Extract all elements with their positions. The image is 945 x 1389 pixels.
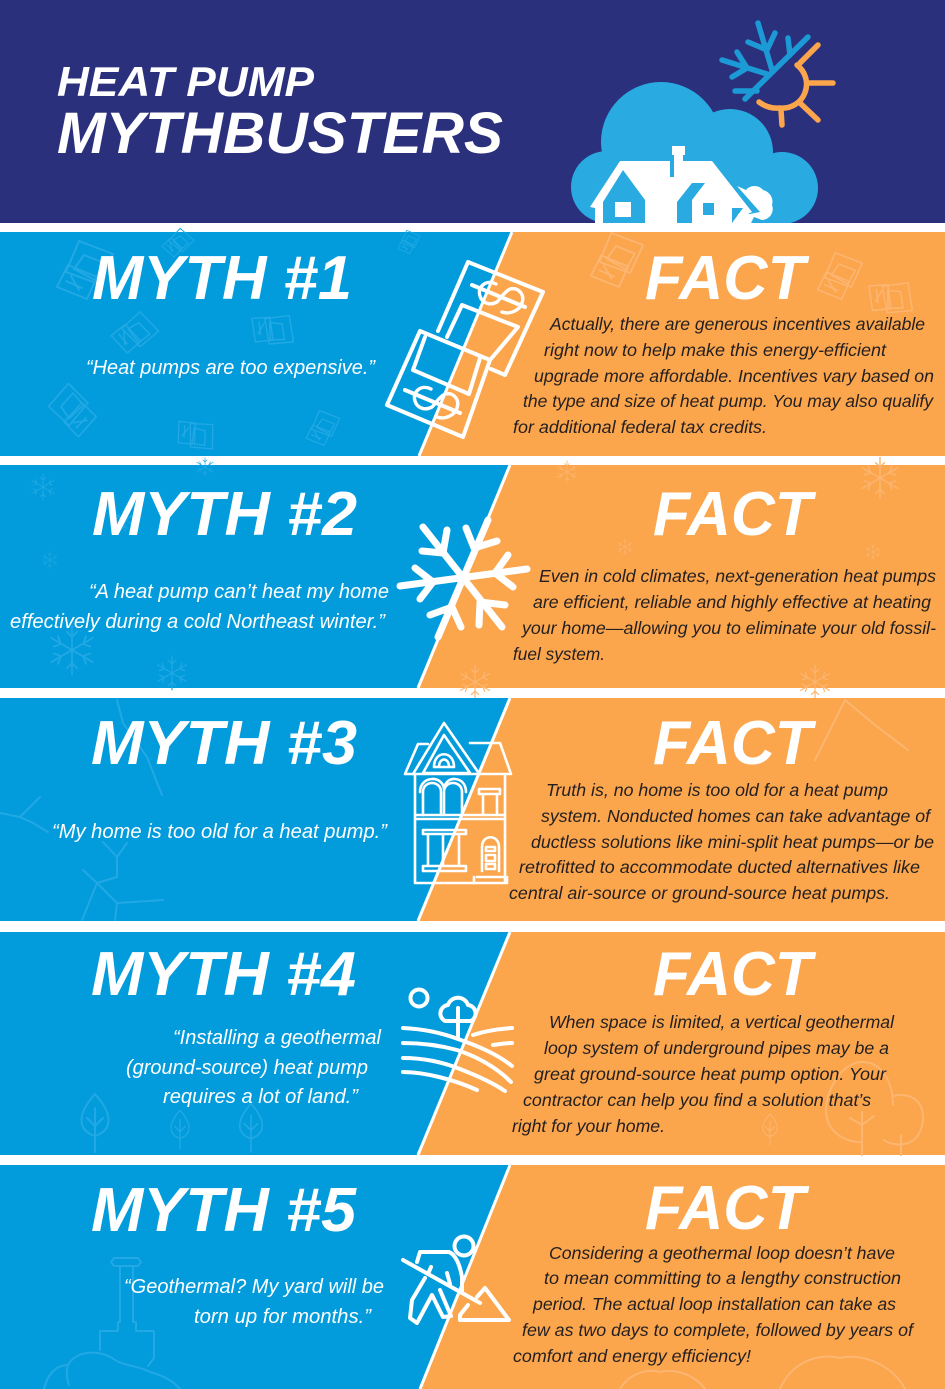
fact 1 text: right now to help make this energy-efficient [544, 340, 887, 360]
fact 3 text: ductless solutions like mini-split heat pumps—or be [531, 832, 934, 852]
fact 5 text [513, 1243, 915, 1366]
fact 5 text: to mean committing to a lengthy construction [544, 1268, 901, 1288]
title: HEAT PUMP [57, 58, 315, 105]
panel: myth 3 and fact [0, 698, 945, 921]
heading: myth 1: MYTH #1 [92, 244, 352, 313]
icon: snowflake [400, 520, 527, 637]
fact 4 text: right for your home. [512, 1116, 665, 1136]
title [57, 58, 503, 166]
fact 3 text: retrofitted to accommodate ducted alternatives like [519, 857, 920, 877]
heading: myth 5: MYTH #5 [91, 1176, 358, 1245]
icon: cloud and house [571, 82, 818, 224]
icon: worker with shovel [403, 1236, 509, 1323]
heading: fact 1: FACT [645, 244, 810, 313]
icon: land and tree [403, 990, 512, 1091]
icon: money bills [387, 262, 543, 437]
myth 2 quote: effectively during a cold Northeast winter.” [10, 611, 386, 633]
fact 5 text: Considering a geothermal loop doesn’t have [549, 1243, 895, 1263]
fact 2 text: fuel system. [513, 644, 605, 664]
fact 4 text: When space is limited, a vertical geothermal [549, 1012, 895, 1032]
myth 5 quote: “Geothermal? My yard will be [124, 1276, 384, 1298]
myth 1 quote: “Heat pumps are too expensive.” [86, 357, 376, 379]
title: MYTHBUSTERS [57, 101, 503, 166]
icon: old house [405, 723, 511, 883]
fact 1 text: Actually, there are generous incentives available [549, 314, 925, 334]
icon: snowflake and sun [722, 23, 833, 125]
fact 2 text [513, 566, 936, 664]
background pattern: snowflakes [32, 457, 898, 699]
myth 4 quote: (ground-source) heat pump [126, 1057, 368, 1079]
fact 1 text: for additional federal tax credits. [513, 417, 767, 437]
panel: myth 5 and fact [0, 1165, 945, 1389]
myth 3 quote: “My home is too old for a heat pump.” [52, 821, 388, 843]
myth 4 quote [126, 1027, 382, 1108]
fact 4 text [512, 1012, 895, 1136]
fact 3 text: central air-source or ground-source heat pumps. [509, 883, 890, 903]
heading: myth 2: MYTH #2 [92, 480, 357, 549]
fact 3 text: Truth is, no home is too old for a heat pump [546, 780, 888, 800]
fact 4 text: great ground-source heat pump option. Your [534, 1064, 887, 1084]
fact 5 text: period. The actual loop installation can take as [532, 1294, 896, 1314]
fact 1 text: the type and size of heat pump. You may also qualify [523, 391, 934, 411]
fact 1 text: upgrade more affordable. Incentives vary based on [534, 366, 934, 386]
heading: myth 3: MYTH #3 [91, 709, 357, 778]
background pattern: cracks [0, 700, 908, 920]
panel: myth 2 and fact [0, 457, 945, 699]
myth 2 quote: “A heat pump can’t heat my home [89, 581, 389, 603]
fact 2 text: are efficient, reliable and highly effective at heating [533, 592, 931, 612]
background pattern: money [42, 225, 921, 459]
heading: fact 2: FACT [653, 480, 817, 549]
fact 2 text: your home—allowing you to eliminate your old fossil- [521, 618, 936, 638]
fact 1 text [513, 314, 934, 437]
header panel [0, 0, 945, 224]
myth 2 quote [10, 581, 389, 633]
fact 5 text: comfort and energy efficiency! [513, 1346, 751, 1366]
panel: myth 1 and fact [0, 225, 945, 459]
panel: myth 4 and fact [0, 932, 945, 1155]
myth 5 quote: torn up for months.” [194, 1306, 372, 1328]
background pattern: plants and trees [82, 1062, 923, 1155]
fact 4 text: loop system of underground pipes may be a [544, 1038, 889, 1058]
background pattern: shovel and mounds [44, 1258, 905, 1389]
fact 3 text: system. Nonducted homes can take advantage of [541, 806, 932, 826]
myth 4 quote: “Installing a geothermal [173, 1027, 382, 1049]
fact 2 text: Even in cold climates, next-generation heat pumps [539, 566, 936, 586]
heading: fact 3: FACT [653, 709, 817, 778]
myth 4 quote: requires a lot of land.” [163, 1086, 359, 1108]
heading: myth 4: MYTH #4 [91, 940, 356, 1009]
heading: fact 4: FACT [653, 940, 817, 1009]
heading: fact 5: FACT [645, 1174, 810, 1243]
fact 4 text: contractor can help you find a solution that’s [523, 1090, 871, 1110]
fact 5 text: few as two days to complete, followed by years of [522, 1320, 915, 1340]
fact 3 text [509, 780, 934, 903]
myth 5 quote [124, 1276, 384, 1328]
